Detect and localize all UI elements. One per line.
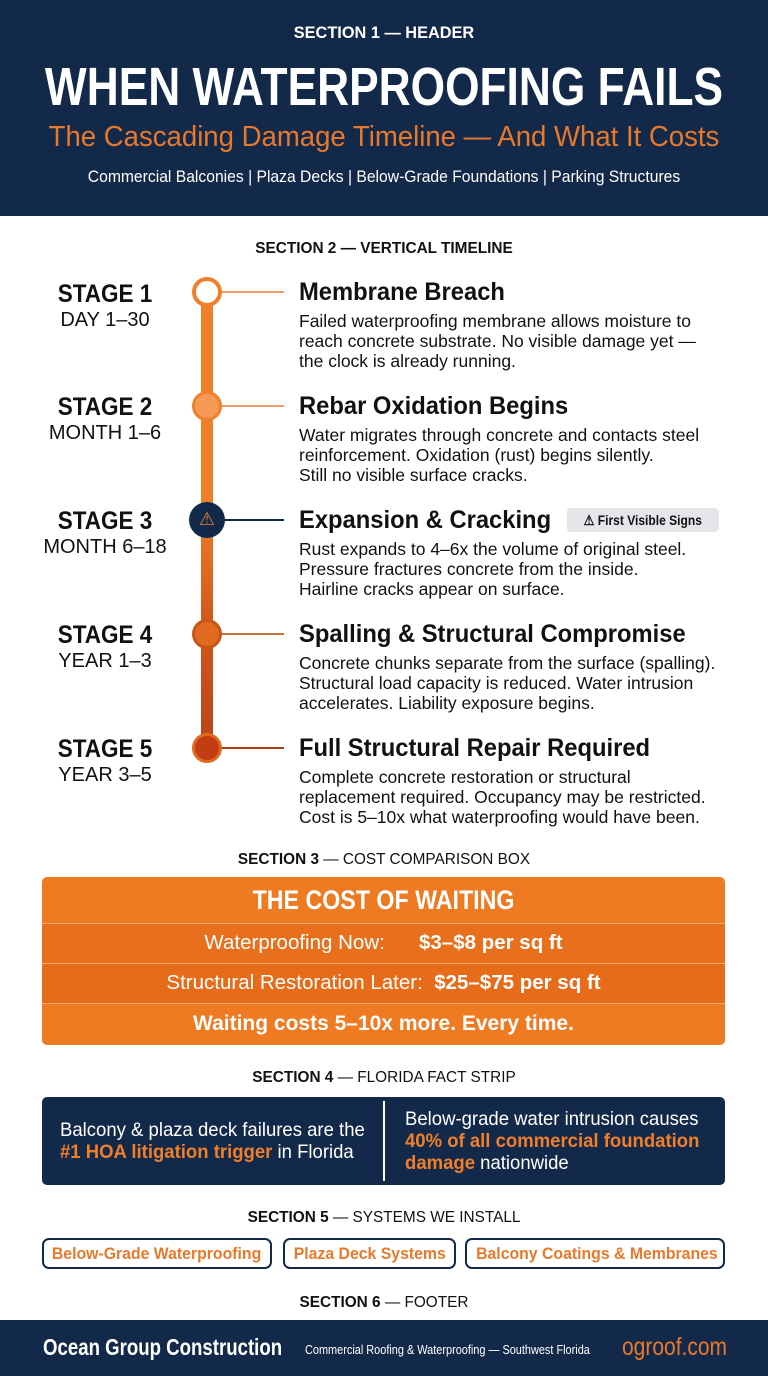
timeline line [201, 290, 213, 760]
pill: balcony [465, 1238, 725, 1269]
footer tagline: Commercial Roofing & Waterproofing — Southwest Florida [305, 1342, 590, 1357]
section 6 label: SECTION 6 — FOOTER [300, 1294, 468, 1311]
stage 4: STAGE 4 [58, 621, 152, 649]
stage 5 node [192, 733, 222, 763]
text: Failed waterproofing membrane allows moisture to [299, 311, 691, 331]
cost title: THE COST OF WAITING [253, 885, 514, 915]
pill: balcony: Balcony Coatings & Membranes [476, 1244, 718, 1263]
stage 1: STAGE 1 [58, 280, 152, 308]
stage 3 node: warning: ⚠ [199, 509, 215, 529]
website: ogroof.com [622, 1333, 727, 1361]
text: Still no visible surface cracks. [299, 465, 528, 485]
fact 1: Balcony & plaza deck failures are the [60, 1119, 365, 1141]
stage 4 node [192, 619, 222, 649]
text: Rebar Oxidation Begins [299, 392, 568, 420]
stage 4 [58, 621, 152, 672]
section 2 label: SECTION 2 — VERTICAL TIMELINE [255, 240, 513, 257]
fact 1 [60, 1119, 365, 1163]
stage 3: STAGE 3 [58, 507, 152, 535]
pill: plaza deck [283, 1238, 456, 1269]
section 5 label: SECTION 5 — SYSTEMS WE INSTALL [248, 1209, 520, 1226]
fact 2: 40% of all commercial foundation [405, 1130, 699, 1152]
title: WHEN WATERPROOFING FAILS [45, 57, 723, 117]
fact 2 [405, 1108, 699, 1174]
pill: below-grade: Below-Grade Waterproofing [52, 1244, 262, 1263]
section 3 label: SECTION 3 — COST COMPARISON BOX [238, 851, 530, 868]
text: Concrete chunks separate from the surface (spalling). [299, 653, 715, 673]
stage 2: MONTH 1–6 [49, 422, 161, 444]
stage 1 [58, 280, 152, 331]
cost comparison box: Waiting costs 5–10x more. Every time. [193, 1012, 574, 1035]
row: waterproofing now [42, 923, 725, 963]
cost comparison box: Waterproofing Now: $3–$8 per sq ft [204, 931, 563, 954]
stage 4: YEAR 1–3 [58, 650, 152, 672]
section 4 label: SECTION 4 — FLORIDA FACT STRIP [252, 1069, 516, 1086]
text: Expansion & Cracking [299, 506, 551, 534]
text: Hairline cracks appear on surface. [299, 579, 565, 599]
fact 2: damage nationwide [405, 1152, 569, 1174]
stage 1: DAY 1–30 [60, 309, 150, 331]
pill: below-grade [42, 1238, 272, 1269]
timeline [189, 277, 284, 763]
stage 3 node: warning [189, 502, 225, 538]
text: reach concrete substrate. No visible damage yet — [299, 331, 696, 351]
stage 5: YEAR 3–5 [58, 764, 152, 786]
text: Spalling & Structural Compromise [299, 620, 686, 648]
fact 2: Below-grade water intrusion causes [405, 1108, 698, 1130]
stage 3: MONTH 6–18 [43, 536, 167, 558]
fact 1: #1 HOA litigation trigger in Florida [60, 1141, 354, 1163]
text: the clock is already running. [299, 351, 516, 371]
text: Pressure fractures concrete from the inside. [299, 559, 638, 579]
stage 2 node [192, 391, 222, 421]
fact strip [42, 1097, 725, 1185]
stage 2: STAGE 2 [58, 393, 152, 421]
text: accelerates. Liability exposure begins. [299, 693, 595, 713]
tagline: Commercial Balconies | Plaza Decks | Below-Grade Foundations | Parking Structures [88, 168, 680, 186]
text: replacement required. Occupancy may be restricted. [299, 787, 706, 807]
section 1 label: SECTION 1 — HEADER [294, 23, 474, 42]
text: Water migrates through concrete and contacts steel [299, 425, 699, 445]
header panel [0, 0, 768, 216]
stage 1 node [192, 277, 222, 307]
stage 3 [43, 507, 167, 558]
cost comparison box [42, 877, 725, 1045]
company name: Ocean Group Construction [43, 1334, 282, 1360]
text: Rust expands to 4–6x the volume of original steel. [299, 539, 686, 559]
text: Membrane Breach [299, 278, 505, 306]
stage 5 [58, 735, 152, 786]
text: Full Structural Repair Required [299, 734, 650, 762]
text: Cost is 5–10x what waterproofing would have been. [299, 807, 700, 827]
badge: first visible signs [567, 508, 719, 532]
footer [0, 1320, 768, 1376]
text: Complete concrete restoration or structural [299, 767, 631, 787]
cost comparison box: Structural Restoration Later: $25–$75 per sq ft [166, 971, 601, 994]
text: reinforcement. Oxidation (rust) begins silently. [299, 445, 654, 465]
row: restoration later [42, 963, 725, 1003]
pill: plaza deck: Plaza Deck Systems [293, 1244, 446, 1263]
text: Structural load capacity is reduced. Water intrusion [299, 673, 693, 693]
badge: first visible signs: ⚠ First Visible Signs [584, 512, 702, 528]
subtitle: The Cascading Damage Timeline — And What It Costs [49, 121, 719, 153]
row: waiting costs [42, 1003, 725, 1004]
stage 5: STAGE 5 [58, 735, 152, 763]
stage 2 [49, 393, 161, 444]
